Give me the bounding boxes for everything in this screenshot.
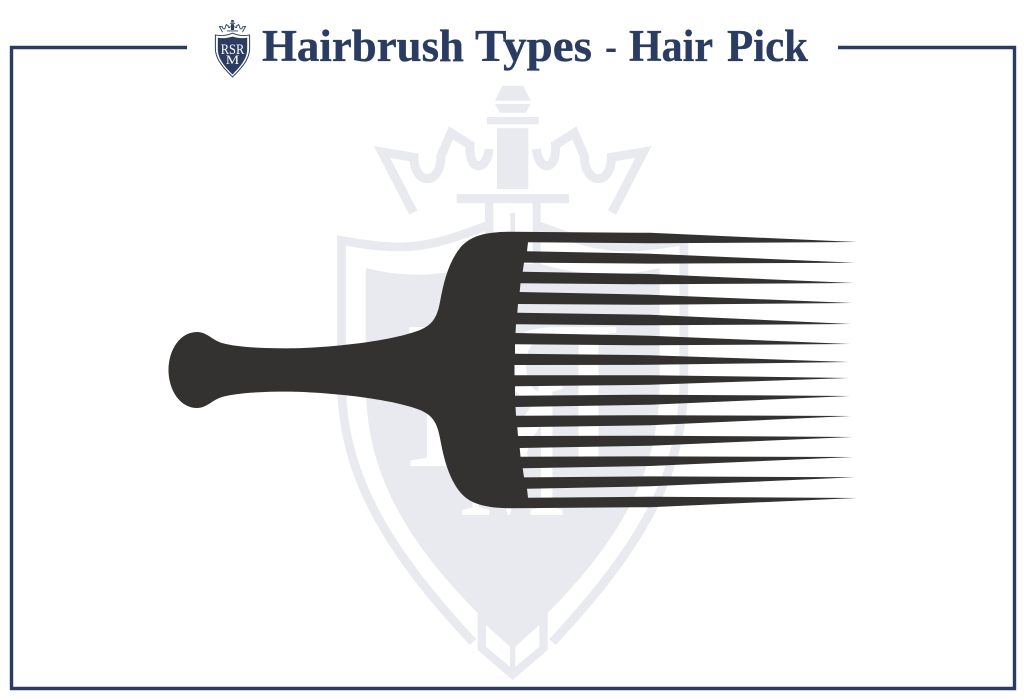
icon: hair pick (168, 232, 857, 508)
icon: logo crest (215, 20, 250, 77)
title: - (605, 21, 617, 71)
watermark crown (382, 133, 643, 212)
watermark sword (457, 117, 569, 285)
icon: logo crest: M (226, 53, 239, 67)
title: Types (475, 21, 592, 71)
watermark inner shield (366, 264, 660, 680)
title: Hair (629, 21, 713, 71)
watermark shield tip cutouts (486, 625, 539, 667)
title: Hairbrush (262, 21, 464, 71)
watermark pommel (495, 86, 531, 113)
watermark monogram: R (403, 277, 545, 512)
watermark: shield and sword crest (342, 86, 684, 680)
watermark monogram (403, 277, 622, 559)
watermark monogram: R (480, 277, 622, 512)
watermark shield outer band (342, 225, 684, 642)
icon: logo crest: RSR (221, 42, 244, 58)
watermark monogram: M (459, 338, 566, 559)
title: Pick (727, 21, 808, 71)
title (262, 21, 808, 71)
